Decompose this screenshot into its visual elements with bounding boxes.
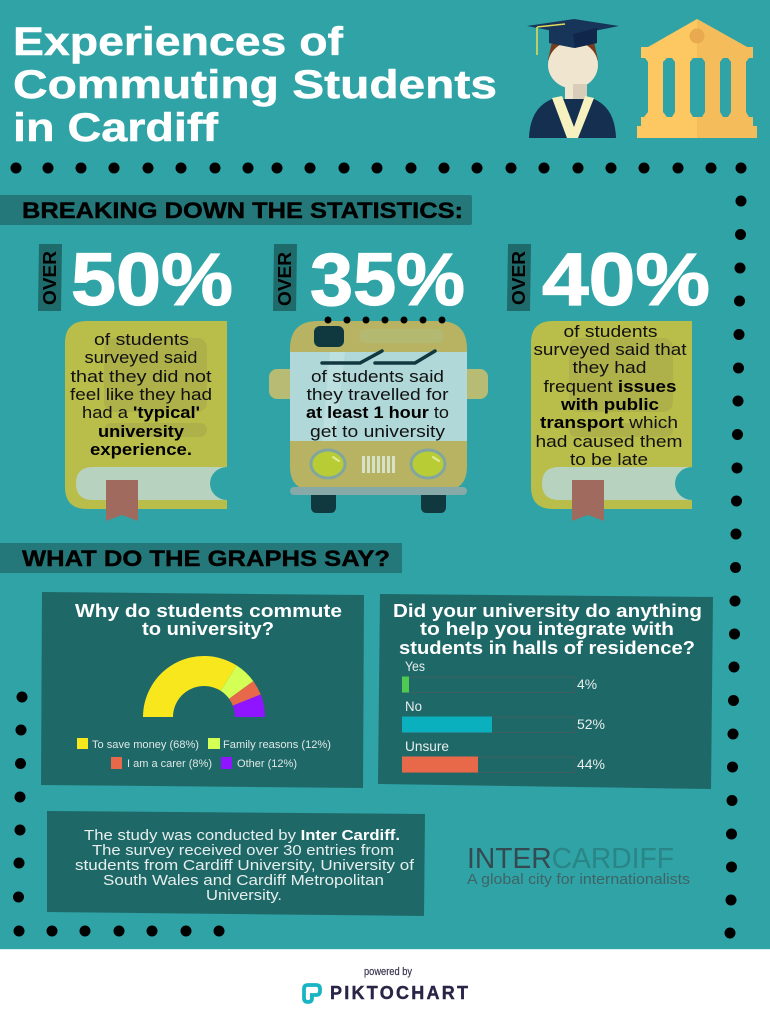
text: book two statistic: of students <box>564 323 658 341</box>
footer: powered by Piktochart: PIKTOCHART <box>330 983 468 1003</box>
bar chart: yes, no, unsure: 52% <box>577 716 605 732</box>
chart legend <box>77 738 331 770</box>
text: bus statistic: they travelled for <box>306 386 449 404</box>
panel title: did your university help: to help you integrate with <box>420 618 674 639</box>
heading: breaking down the statistics: BREAKING DOWN THE STATISTICS: <box>22 198 463 223</box>
text: book one statistic: surveyed said <box>84 349 198 367</box>
bar chart: yes, no, unsure: No <box>405 698 422 714</box>
heading: breaking down the statistics <box>0 195 472 225</box>
stat: over 35%: 35% <box>310 238 465 321</box>
footer: powered by Piktochart: powered by <box>364 966 412 978</box>
stat: over 35%: OVER <box>275 252 295 306</box>
chart legend: I am a carer (8%) <box>127 758 212 770</box>
text: book two statistic: to be late <box>570 451 648 469</box>
panel: study note: The survey received over 30 entries from <box>92 843 394 859</box>
chart legend: To save money (68%) <box>92 739 199 751</box>
stat: over 40%: 40% <box>542 238 710 321</box>
heading: what do the graphs say: WHAT DO THE GRAPHS SAY? <box>22 546 390 571</box>
icon: graduate student <box>527 19 619 138</box>
text: book one statistic: of students <box>94 331 189 349</box>
logo: Inter Cardiff <box>467 843 690 888</box>
heading: what do the graphs say <box>0 543 402 573</box>
bar chart: yes, no, unsure <box>402 658 605 772</box>
stat: over 50%: OVER <box>40 251 60 305</box>
panel: university integration <box>378 594 713 789</box>
text: book two statistic: transport which <box>540 414 678 432</box>
text: book one statistic: experience. <box>90 441 192 459</box>
text: book two statistic: surveyed said that <box>534 341 687 359</box>
text: book two statistic: frequent issues <box>544 378 676 396</box>
panel title: did your university help: Did your university do anything <box>393 600 702 621</box>
icon: book two <box>531 321 692 521</box>
text: book one statistic <box>70 331 212 459</box>
text: book two statistic: had caused them <box>536 433 682 451</box>
bar chart: yes, no, unsure: Unsure <box>405 738 449 754</box>
panel: study note: The study was conducted by Inter Cardiff. <box>84 828 400 844</box>
text: book two statistic: with public <box>560 396 659 414</box>
panel title: did your university help <box>393 600 702 658</box>
panel title: why do students commute <box>75 600 342 639</box>
logo: Inter Cardiff: A global city for internationalists <box>467 871 690 888</box>
panel title: did your university help: students in halls of residence? <box>399 637 695 658</box>
text: bus statistic: get to university <box>310 423 446 441</box>
text: bus statistic: at least 1 hour to <box>306 404 449 422</box>
chart: half donut of commuting reasons <box>143 656 265 717</box>
bar chart: yes, no, unsure: 44% <box>577 756 605 772</box>
chart legend: Family reasons (12%) <box>223 739 331 751</box>
icon: bus <box>269 316 488 513</box>
text: bus statistic: of students said <box>311 368 444 386</box>
panel: study note: South Wales and Cardiff Metropolitan <box>103 873 384 889</box>
logo: Inter Cardiff: INTERCARDIFF <box>467 843 674 875</box>
text: book one statistic: that they did not <box>70 368 212 386</box>
panel: study note: University. <box>206 888 282 904</box>
title <box>13 20 497 150</box>
panel title: why do students commute: to university? <box>142 618 274 639</box>
stat: over 50%: 50% <box>71 238 233 321</box>
panel: study note <box>47 811 425 916</box>
text: book one statistic: feel like they had <box>70 386 212 404</box>
icon: university building <box>637 19 757 138</box>
icon: book one <box>65 321 227 521</box>
title: Commuting Students <box>13 63 497 107</box>
stat: over 40%: OVER <box>509 251 529 305</box>
text: book two statistic <box>534 323 687 469</box>
panel title: why do students commute: Why do students commute <box>75 600 342 621</box>
bar chart: yes, no, unsure: Yes <box>405 658 425 674</box>
text: bus statistic <box>306 368 449 441</box>
footer: powered by Piktochart <box>304 966 468 1003</box>
panel: why students commute <box>41 592 364 788</box>
chart legend: Other (12%) <box>237 758 297 770</box>
bar chart: yes, no, unsure: 4% <box>577 676 597 692</box>
panel: study note: students from Cardiff University, University of <box>75 858 415 874</box>
text: book two statistic: they had <box>572 359 646 377</box>
title: Experiences of <box>13 20 344 64</box>
text: book one statistic: university <box>98 423 185 441</box>
icon: Piktochart logo <box>304 985 320 1002</box>
text: book one statistic: had a 'typical' <box>82 404 200 422</box>
title: in Cardiff <box>13 106 219 150</box>
